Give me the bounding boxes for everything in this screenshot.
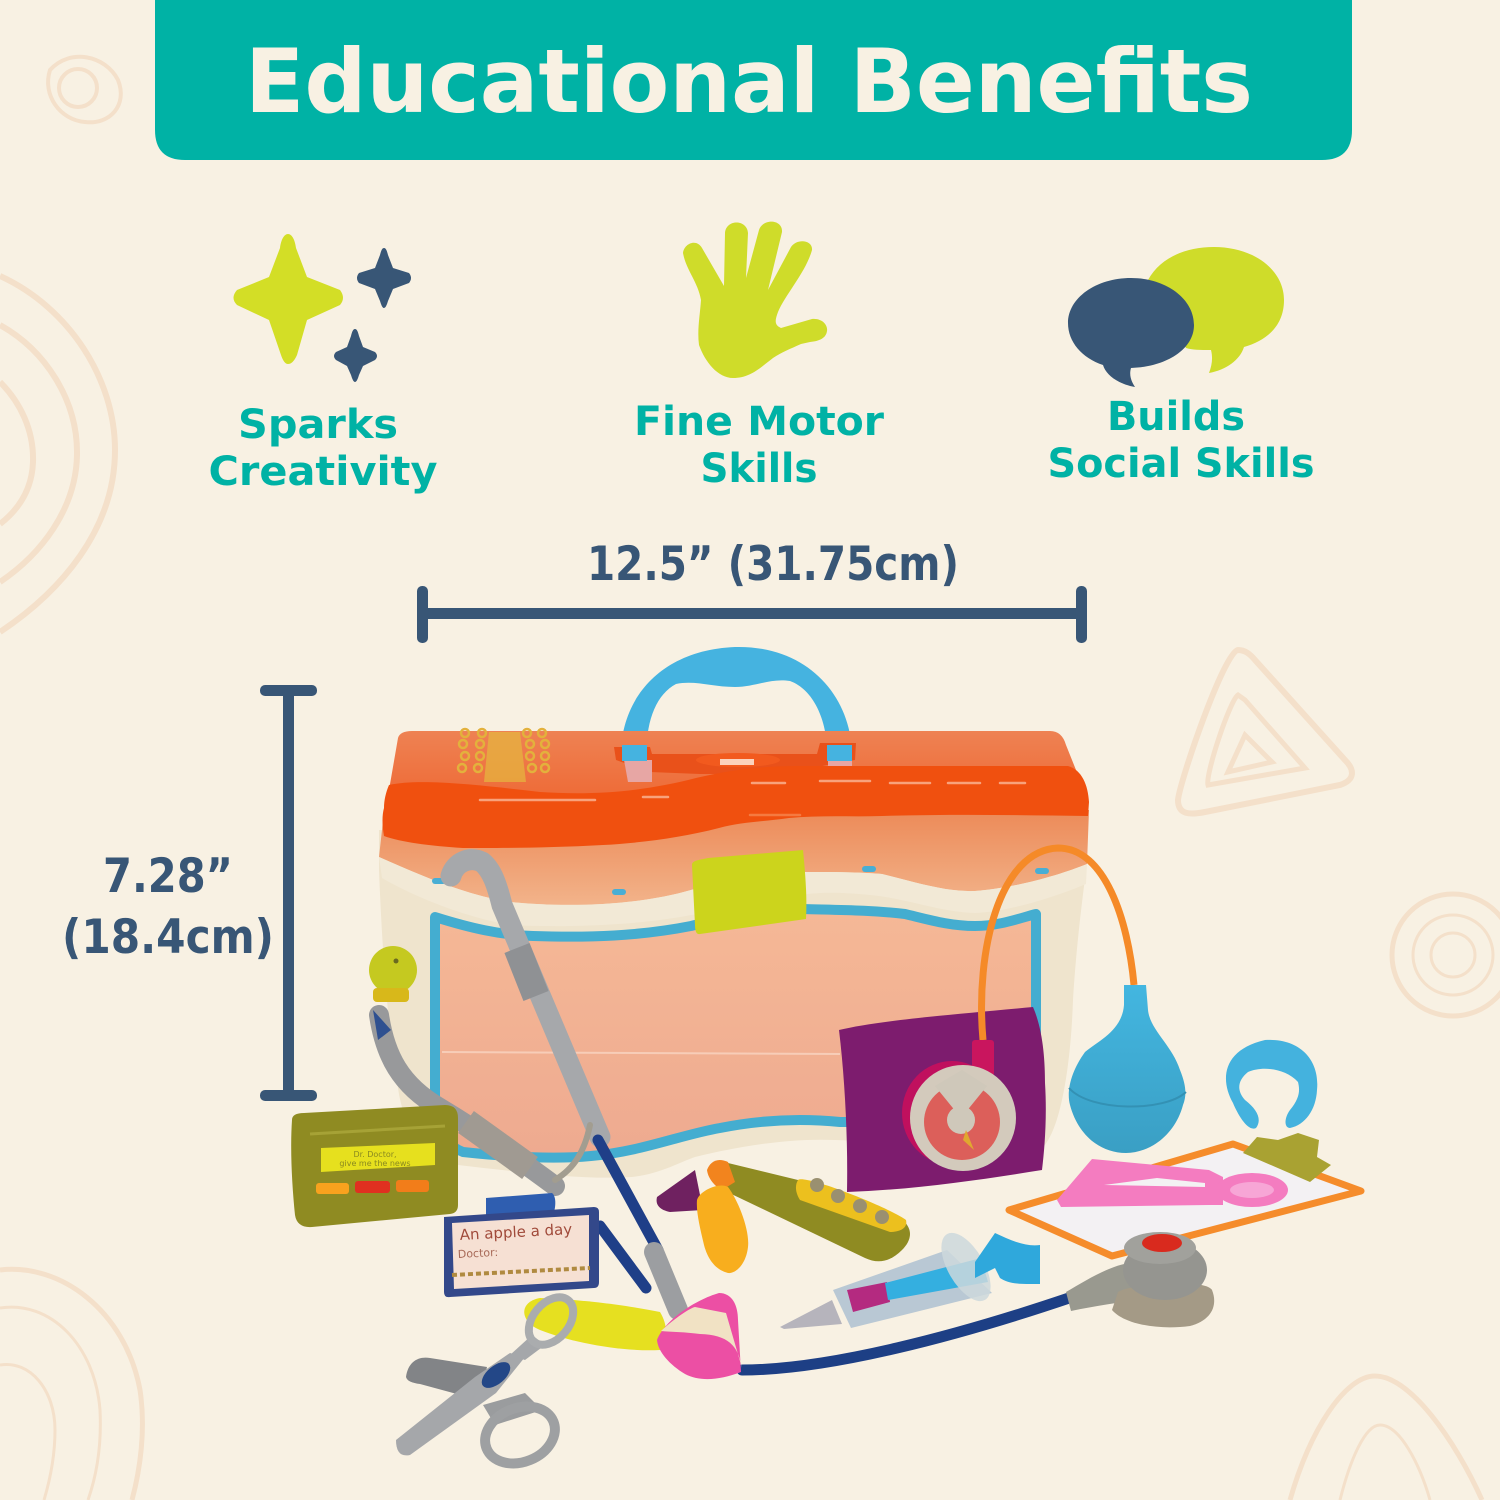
pager: Dr. Doctor, (353, 1150, 397, 1159)
label: sparks creativity (208, 402, 438, 495)
name badge (444, 1193, 599, 1297)
otoscope toy (657, 1160, 910, 1273)
width dimension label: 12.5” (31.75cm) (587, 537, 959, 592)
window shelf line (442, 1052, 840, 1054)
height dimension arrow (260, 685, 317, 1101)
label: builds social skills (1048, 394, 1314, 487)
icon: speech bubbles (1068, 247, 1284, 387)
label: builds social skills: Builds (1107, 394, 1245, 440)
width dimension arrow (417, 586, 1087, 643)
label: builds social skills: Social Skills (1048, 441, 1314, 487)
lid pattern (458, 729, 549, 782)
name badge: Doctor: (457, 1246, 498, 1261)
rim pegs (432, 866, 1049, 895)
lid handle recess (614, 743, 856, 782)
purple blood pressure cuff (839, 1007, 1046, 1192)
scissors (396, 1289, 582, 1474)
thermometer and reflex hammer (524, 1293, 742, 1379)
tinted upper wall (379, 810, 1089, 905)
label: fine motor skills: Skills (700, 446, 818, 492)
blue pump bulb (1069, 985, 1186, 1153)
lid highlights (480, 781, 1025, 815)
name badge: An apple a day (459, 1220, 573, 1244)
stethoscope earpiece (369, 946, 417, 1040)
icon: sparkles (234, 234, 411, 382)
label: fine motor skills: Fine Motor (634, 399, 884, 445)
toy doctor kit case (379, 647, 1089, 1178)
title banner (155, 0, 1352, 160)
label: fine motor skills (634, 399, 884, 492)
label: sparks creativity: Creativity (208, 449, 438, 495)
pink tweezers (1057, 1159, 1288, 1207)
height dimension label: (18.4cm) (62, 910, 274, 965)
yellow latch (692, 850, 806, 934)
pager: give me the news (339, 1159, 411, 1168)
pressure gauge (902, 1040, 1016, 1171)
window (435, 909, 1036, 1158)
stethoscope tubes (379, 860, 1072, 1370)
stethoscope chest piece (1066, 1232, 1214, 1327)
lid front rim (382, 766, 1089, 848)
case handle (621, 647, 852, 765)
height dimension label: 7.28” (103, 849, 233, 904)
height dimension label (62, 849, 274, 965)
clipboard (1009, 1133, 1361, 1256)
pager (291, 1105, 458, 1227)
case body (379, 830, 1087, 1178)
case rim (379, 857, 1087, 926)
blue cuff ring (1226, 1040, 1317, 1129)
label: sparks creativity: Sparks (238, 402, 398, 448)
orange tube (982, 848, 1134, 1040)
title: Educational Benefits (245, 30, 1253, 133)
syringe (780, 1225, 1040, 1329)
icon: hand (683, 222, 827, 378)
lid top surface (389, 731, 1088, 800)
